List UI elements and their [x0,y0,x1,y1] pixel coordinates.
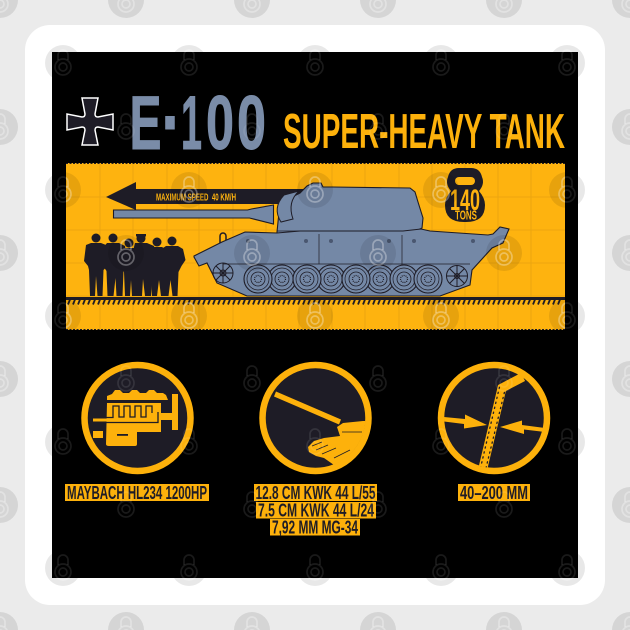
armament labels [254,483,377,538]
title: E-100: E [130,81,162,166]
panel: tank profile band [66,163,565,330]
armament labels: 7,92 MM MG-34 [272,518,358,538]
ground line and track hatching [66,297,565,304]
maximum speed arrow: MAXIMUM SPEED 40 KM/H [156,192,236,204]
hull [194,227,509,296]
tank [194,183,509,296]
maximum speed arrow [106,182,306,210]
title: E-100: 1 [181,81,202,166]
road wheels [244,265,442,293]
soldiers silhouettes [84,234,186,296]
idler wheel [446,266,468,286]
black panel [52,52,578,578]
title: E-100 [130,56,266,173]
title: E-100: 0 [206,81,234,166]
engine badge circle [84,365,190,471]
panel: engine [65,365,209,503]
iron cross icon [67,98,113,145]
panel: armour [441,365,547,503]
engine label: MAYBACH HL234 1200HP [67,483,207,503]
armament badge circle [262,365,368,471]
armour label: 40–200 MM [460,483,528,503]
kettlebell weight badge [445,168,485,222]
tow hook [220,233,226,243]
icon: tank gun [274,392,371,465]
mantlet [277,191,299,222]
gun barrel [114,205,274,224]
kettlebell weight badge: TONS [455,208,477,222]
hull details [223,231,470,265]
armament labels: 7.5 CM KWK 44 L/24 [258,500,374,520]
armour badge circle [441,365,547,471]
title: E-100: 0 [237,81,266,166]
armament labels: 12.8 CM KWK 44 L/55 [256,483,376,503]
panel: armament [254,365,377,538]
turret [277,183,423,233]
icon: armour plate with arrows [444,377,545,468]
kettlebell weight badge: 140 [450,184,480,217]
title: E-100: - [164,56,176,173]
engine label [65,483,209,503]
sprocket [213,263,233,283]
icon: engine [93,390,178,446]
